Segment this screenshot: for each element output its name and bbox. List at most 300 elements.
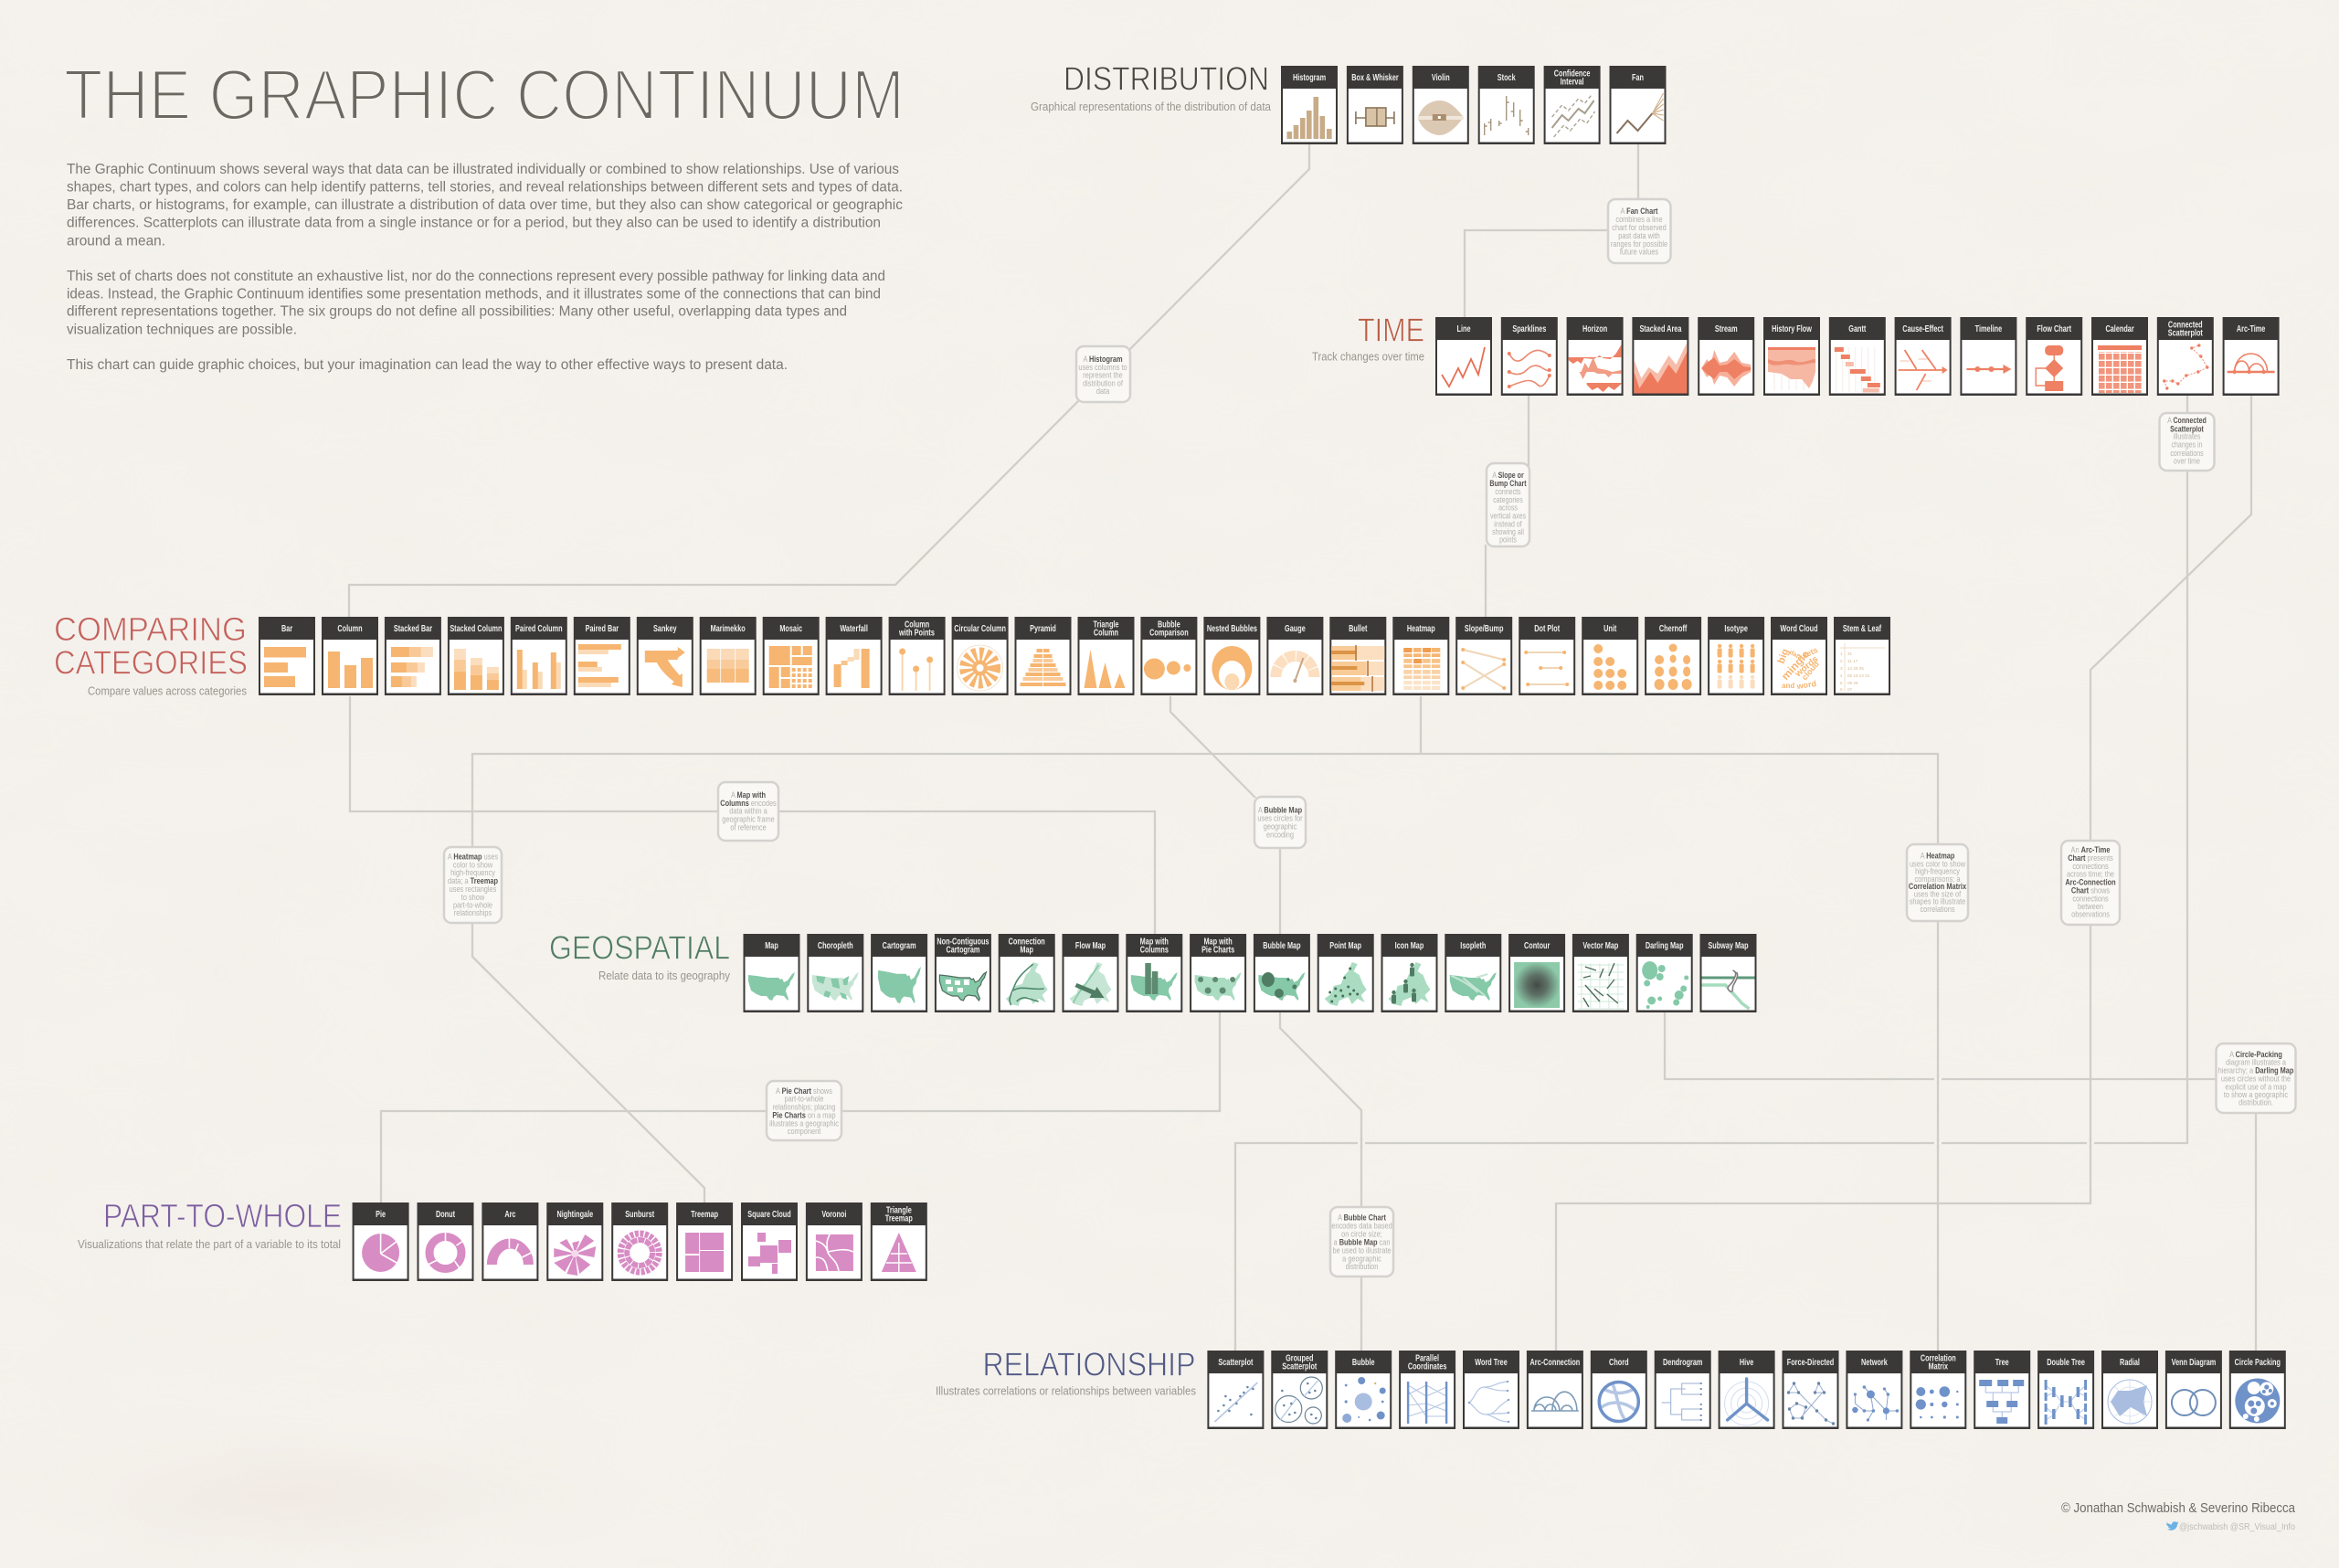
chart card: Line: Line bbox=[1457, 323, 1471, 334]
chart card: Arc-Connection: Arc-Connection bbox=[1530, 1357, 1580, 1367]
callout: Slope or Bump Chart: showing all bbox=[1492, 527, 1524, 536]
callout: Pie Chart: Pie Charts on a map bbox=[772, 1111, 836, 1119]
callout: Slope or Bump Chart: connects bbox=[1495, 487, 1521, 496]
callout: Arc-Time and Arc-Connection: connections bbox=[2072, 895, 2109, 903]
chart card: Stock: Stock bbox=[1498, 72, 1516, 82]
chart card: Triangle Column: Column bbox=[1094, 627, 1118, 638]
chart card: Grouped Scatterplot bbox=[1271, 1351, 1328, 1429]
chart card: Chernoff: Chernoff bbox=[1659, 623, 1687, 633]
callout: Fan Chart: A Fan Chart bbox=[1620, 207, 1658, 216]
chart card: Stacked Area bbox=[1632, 317, 1688, 396]
chart card: Sunburst: Sunburst bbox=[625, 1209, 654, 1219]
chart card: Pyramid bbox=[1014, 617, 1071, 695]
heading: Relationship: RELATIONSHIP bbox=[983, 1345, 1195, 1383]
callout: Heatmap and Treemap bbox=[444, 847, 502, 923]
callout: Heatmap and Correlation Matrix: A Heatmap bbox=[1921, 852, 1954, 861]
callout: Histogram: distribution of bbox=[1083, 379, 1124, 387]
chart card: Tree bbox=[1974, 1351, 2030, 1429]
callout: Map with Columns: of reference bbox=[730, 823, 767, 832]
chart card: Scatterplot bbox=[1207, 1351, 1264, 1429]
chart card: Map with Pie Charts: Pie Charts bbox=[1201, 944, 1234, 955]
panel: Distribution bbox=[1031, 60, 1667, 144]
chart card: Treemap: Treemap bbox=[691, 1209, 718, 1219]
callout: Fan Chart: chart for observed bbox=[1612, 223, 1667, 232]
chart card: Bubble Comparison bbox=[1140, 617, 1197, 695]
chart card: Radial bbox=[2101, 1351, 2158, 1429]
chart card: Map: Map bbox=[765, 940, 778, 950]
chart card: Bubble bbox=[1335, 1351, 1392, 1429]
chart card: Isopleth: Isopleth bbox=[1460, 940, 1486, 950]
chart card: Hive: Hive bbox=[1740, 1357, 1753, 1367]
chart card: Stem & Leaf: Stem & Leaf bbox=[1843, 623, 1881, 633]
chart card: Bubble Comparison: Comparison bbox=[1149, 627, 1189, 638]
panel: Comparing Categories bbox=[54, 610, 1890, 698]
callout: Heatmap and Treemap: uses rectangles bbox=[450, 885, 496, 894]
callout: Heatmap and Correlation Matrix: shapes to illustrate bbox=[1910, 897, 1966, 906]
callout: Circle Packing and Dorling Map: A Circle-Packing bbox=[2229, 1050, 2282, 1059]
heading: Comparing Categories: COMPARING bbox=[54, 610, 247, 648]
chart card: Confidence Interval: Confidence bbox=[1554, 68, 1591, 79]
chart card: Pie: Pie bbox=[376, 1209, 386, 1219]
callout: Circle Packing and Dorling Map: hierarchy; a Darling Map bbox=[2218, 1066, 2293, 1075]
chart card: Treemap bbox=[676, 1202, 733, 1281]
subtitle: Time: Track changes over time bbox=[1312, 351, 1424, 364]
chart card: Bubble Comparison: Bubble bbox=[1158, 619, 1180, 630]
callout: Heatmap and Correlation Matrix: high-frequency bbox=[1915, 867, 1961, 876]
chart card: Box & Whisker: Box & Whisker bbox=[1351, 72, 1399, 82]
callout: Heatmap and Treemap: data; a Treemap bbox=[448, 876, 498, 885]
callout: Connected Scatterplot: illustrates bbox=[2174, 432, 2200, 441]
title: THE GRAPHIC CONTINUUM bbox=[64, 55, 905, 135]
chart card: Fan: Fan bbox=[1632, 72, 1644, 82]
chart card: Slope/Bump: Slope/Bump bbox=[1465, 623, 1503, 633]
chart card: Paired Bar bbox=[574, 617, 630, 695]
callout: Heatmap and Correlation Matrix bbox=[1907, 844, 1968, 921]
panel: Geospatial bbox=[549, 928, 1756, 1012]
chart card: Word Tree bbox=[1463, 1351, 1519, 1429]
chart card: Non-Contiguous Cartogram bbox=[935, 934, 991, 1012]
chart card: Sankey: Sankey bbox=[653, 623, 677, 633]
chart card: Stream: Stream bbox=[1715, 323, 1738, 334]
chart card: Radial: Radial bbox=[2120, 1357, 2140, 1367]
chart card: Paired Column: Paired Column bbox=[515, 623, 563, 633]
intro text: The Graphic Continuum shows several ways that data can be illustrated individually or combined to show relationships. Use of various bbox=[67, 162, 899, 177]
chart card: Arc-Time: Arc-Time bbox=[2237, 323, 2265, 334]
chart card: Stacked Bar bbox=[385, 617, 441, 695]
callout: Bubble Map: uses circles for bbox=[1257, 814, 1303, 823]
chart card: Network: Network bbox=[1861, 1357, 1888, 1367]
chart card: Stem & Leaf: 31 bbox=[1847, 652, 1853, 656]
chart card: Connection Map: Connection bbox=[1009, 936, 1045, 947]
chart card: Darling Map: Darling Map bbox=[1646, 940, 1684, 950]
chart card: Subway Map: Subway Map bbox=[1708, 940, 1749, 950]
chart card: Venn Diagram: Venn Diagram bbox=[2172, 1357, 2216, 1367]
callout: Fan Chart bbox=[1608, 199, 1670, 263]
callout: Bubble Map: encoding bbox=[1266, 831, 1294, 839]
chart card: Bullet bbox=[1329, 617, 1386, 695]
chart card: Map with Pie Charts: Map with bbox=[1203, 936, 1233, 947]
callout: Circle Packing and Dorling Map bbox=[2217, 1044, 2295, 1113]
chart card: Flow Map: Flow Map bbox=[1075, 940, 1106, 950]
subtitle: Part-to-Whole: Visualizations that relate the part of a variable to its total bbox=[78, 1238, 341, 1251]
callout: Map with Columns: A Map with bbox=[731, 790, 766, 800]
callout: Slope or Bump Chart bbox=[1487, 463, 1529, 546]
callout: Bubble Map: geographic bbox=[1264, 822, 1297, 831]
chart card: Cartogram bbox=[871, 934, 927, 1012]
chart card: Heatmap: Heatmap bbox=[1407, 623, 1435, 633]
chart card: Violin: Violin bbox=[1432, 72, 1450, 82]
callout: Pie Chart: illustrates a geographic bbox=[769, 1119, 839, 1128]
chart card: Circle Packing bbox=[2229, 1351, 2286, 1429]
intro text: shapes, chart types, and colors can help identify patterns, tell stories, and reveal relationships between different sets and types of data. bbox=[67, 180, 903, 196]
chart card: Column with Points: with Points bbox=[898, 627, 935, 638]
chart card: Box & Whisker bbox=[1347, 66, 1403, 144]
intro text bbox=[67, 162, 903, 373]
chart card: History Flow: History Flow bbox=[1772, 323, 1812, 334]
callout: Slope or Bump Chart: across bbox=[1498, 503, 1518, 513]
chart card: Isotype: Isotype bbox=[1724, 623, 1748, 633]
chart card: Bubble Map: Bubble Map bbox=[1263, 940, 1301, 950]
chart card: Stock bbox=[1478, 66, 1535, 144]
chart card: Connected Scatterplot bbox=[2157, 317, 2214, 396]
chart card: Nested Bubbles bbox=[1203, 617, 1260, 695]
chart card: Voronoi: Voronoi bbox=[821, 1209, 846, 1219]
chart card: Nightingale bbox=[546, 1202, 603, 1281]
chart card: Connected Scatterplot: Scatterplot bbox=[2168, 327, 2203, 338]
credit bbox=[2061, 1501, 2296, 1532]
callout: Slope or Bump Chart: instead of bbox=[1494, 520, 1522, 529]
callout: Bubble Chart: distribution bbox=[1346, 1262, 1378, 1271]
chart card: Map with Pie Charts bbox=[1190, 934, 1246, 1012]
callout: Fan Chart: past data with bbox=[1618, 231, 1660, 240]
chart card: Sparklines bbox=[1501, 317, 1558, 396]
callout: Bubble Chart: on circle size; bbox=[1341, 1230, 1382, 1238]
chart card: Nested Bubbles: Nested Bubbles bbox=[1207, 623, 1257, 633]
chart card: Dendrogram bbox=[1655, 1351, 1711, 1429]
callout: Map with Columns bbox=[718, 782, 778, 841]
chart card: Nightingale: Nightingale bbox=[556, 1209, 593, 1219]
chart card: Venn Diagram bbox=[2165, 1351, 2222, 1429]
intro text: ideas. Instead, the Graphic Continuum identifies some presentation methods, and it illustrates some of the connections that can bind bbox=[67, 286, 881, 302]
chart card: Violin bbox=[1413, 66, 1469, 144]
chart card: Column bbox=[322, 617, 378, 695]
chart card: Word Cloud: big bbox=[1776, 647, 1791, 665]
chart card: Histogram bbox=[1281, 66, 1338, 144]
chart card: Calendar bbox=[2091, 317, 2148, 396]
callout: Arc-Time and Arc-Connection bbox=[2061, 841, 2120, 925]
chart card: Timeline: Timeline bbox=[1975, 323, 2002, 334]
callout: Connected Scatterplot: correlations bbox=[2170, 449, 2204, 458]
chart card: Word Cloud: word bbox=[1795, 679, 1817, 691]
callout: Bubble Chart: be used to illustrate bbox=[1333, 1246, 1392, 1255]
chart card: Stem & Leaf: 2 bbox=[1840, 659, 1843, 663]
chart card: Word Cloud: mingle bbox=[1779, 648, 1812, 683]
chart card: Force-Directed bbox=[1782, 1351, 1838, 1429]
callout: Bubble Chart: a geographic bbox=[1342, 1255, 1381, 1263]
chart card: Column with Points bbox=[889, 617, 946, 695]
callout: Arc-Time and Arc-Connection: across time; the bbox=[2067, 870, 2114, 879]
chart card: Icon Map: Icon Map bbox=[1395, 940, 1424, 950]
chart card: History Flow bbox=[1763, 317, 1820, 396]
chart card: Horizon bbox=[1567, 317, 1624, 396]
callout: Heatmap and Correlation Matrix: correlations bbox=[1920, 905, 1955, 914]
callout: Slope or Bump Chart: points bbox=[1499, 535, 1517, 545]
chart card: Calendar: Calendar bbox=[2105, 323, 2134, 334]
callout: Map with Columns: Columns encodes bbox=[720, 799, 777, 808]
chart card: Stem & Leaf: 5 bbox=[1840, 681, 1843, 685]
chart card: Confidence Interval: Interval bbox=[1561, 76, 1584, 87]
chart card: Arc: Arc bbox=[504, 1209, 516, 1219]
chart card: Triangle Treemap: Treemap bbox=[885, 1213, 913, 1224]
callout: Histogram: represent the bbox=[1083, 371, 1123, 380]
intro text: visualization techniques are possible. bbox=[67, 322, 297, 338]
chart card: Mosaic: Mosaic bbox=[779, 623, 802, 633]
callout: Heatmap and Treemap: A Heatmap uses bbox=[448, 853, 498, 862]
chart card: Network bbox=[1846, 1351, 1902, 1429]
callout: Heatmap and Correlation Matrix: uses color to show bbox=[1910, 860, 1965, 868]
callout: Arc-Time and Arc-Connection: connections bbox=[2072, 862, 2109, 871]
callout: Connected Scatterplot: over time bbox=[2174, 457, 2200, 466]
chart card: Stacked Column: Stacked Column bbox=[450, 623, 502, 633]
callout: Bubble Map bbox=[1254, 797, 1306, 848]
chart card: Stem & Leaf: 05 18 24 31 bbox=[1847, 673, 1870, 678]
chart card: Connection Map bbox=[999, 934, 1055, 1012]
chart card: Marimekko: Marimekko bbox=[711, 623, 746, 633]
chart card: Bubble Map bbox=[1254, 934, 1310, 1012]
chart card: Tree: Tree bbox=[1995, 1357, 2009, 1367]
callout: Heatmap and Treemap: high-frequency bbox=[450, 868, 496, 877]
callout: Connected Scatterplot: Scatterplot bbox=[2170, 425, 2204, 434]
credit: © Jonathan Schwabish & Severino Ribecca bbox=[2061, 1501, 2296, 1516]
callout: Heatmap and Treemap: color to show bbox=[453, 861, 492, 869]
chart card: Circle Packing: Circle Packing bbox=[2235, 1357, 2281, 1367]
chart card: Line bbox=[1435, 317, 1492, 396]
chart card: Triangle Column bbox=[1078, 617, 1135, 695]
chart card: Force-Directed: Force-Directed bbox=[1787, 1357, 1834, 1367]
chart card: Contour bbox=[1508, 934, 1565, 1012]
chart card: Bar: Bar bbox=[281, 623, 293, 633]
chart card: Word Cloud: cloud bbox=[1800, 659, 1821, 682]
chart card: Sparklines: Sparklines bbox=[1512, 323, 1546, 334]
chart card: Choropleth: Choropleth bbox=[818, 940, 853, 950]
chart card: Arc-Connection bbox=[1527, 1351, 1583, 1429]
panel: Time bbox=[1312, 311, 2280, 396]
chart card: Waterfall: Waterfall bbox=[840, 623, 868, 633]
chart card: Stem & Leaf bbox=[1834, 617, 1890, 695]
chart card: Choropleth bbox=[807, 934, 863, 1012]
chart card: Dot Plot: Dot Plot bbox=[1534, 623, 1560, 633]
chart card: Paired Column bbox=[511, 617, 567, 695]
chart card: Stem & Leaf: 14 26 35 bbox=[1847, 666, 1864, 671]
chart card: Triangle Column: Triangle bbox=[1094, 619, 1119, 630]
chart card: Word Cloud: Word Cloud bbox=[1780, 623, 1818, 633]
intro text: different representations together. The six groups do not define all possibilities: Many other useful, overlapping data types and bbox=[67, 304, 847, 320]
chart card: Cause-Effect bbox=[1895, 317, 1952, 396]
subtitle: Relationship: Illustrates correlations or relationships between variables bbox=[936, 1385, 1196, 1398]
heading: Part-to-Whole: PART-TO-WHOLE bbox=[103, 1197, 342, 1234]
chart card: Sankey bbox=[637, 617, 693, 695]
callout: Map with Columns: geographic frame bbox=[722, 815, 775, 824]
chart card: Slope/Bump bbox=[1455, 617, 1512, 695]
callout: Arc-Time and Arc-Connection: Chart presents bbox=[2068, 853, 2113, 863]
callout: Arc-Time and Arc-Connection: observations bbox=[2071, 910, 2110, 919]
chart card: Darling Map bbox=[1636, 934, 1693, 1012]
chart card: Marimekko bbox=[700, 617, 757, 695]
chart card: Hive bbox=[1719, 1351, 1775, 1429]
callout: Pie Chart: part-to-whole bbox=[784, 1095, 824, 1104]
heading: Geospatial: GEOSPATIAL bbox=[549, 928, 730, 967]
icon: twitter bird bbox=[2166, 1521, 2178, 1531]
chart card: Parallel Coordinates bbox=[1399, 1351, 1455, 1429]
chart card: Chord bbox=[1591, 1351, 1647, 1429]
chart card: Stem & Leaf: 09 28 bbox=[1847, 681, 1858, 685]
chart card: Stem & Leaf: 4 bbox=[1840, 673, 1843, 678]
chart card: Dot Plot bbox=[1519, 617, 1575, 695]
callout: Histogram: A Histogram bbox=[1083, 355, 1123, 364]
chart card: Correlation Matrix: Correlation bbox=[1921, 1352, 1956, 1363]
chart card: Correlation Matrix bbox=[1910, 1351, 1966, 1429]
chart card: Point Map: Point Map bbox=[1329, 940, 1361, 950]
callout: Pie Chart: component bbox=[788, 1127, 821, 1136]
callout: Fan Chart: future values bbox=[1620, 248, 1658, 257]
chart card: Flow Chart bbox=[2026, 317, 2082, 396]
chart card: Cartogram: Cartogram bbox=[883, 940, 916, 950]
callout: Heatmap and Correlation Matrix: Correlation Matrix bbox=[1909, 882, 1967, 891]
chart card: Map bbox=[744, 934, 800, 1012]
callout: Connected Scatterplot: A Connected bbox=[2167, 416, 2207, 425]
callout: Bubble Map: A Bubble Map bbox=[1258, 806, 1302, 815]
callout: Fan Chart: ranges for possible bbox=[1611, 239, 1668, 249]
chart card: Correlation Matrix: Matrix bbox=[1929, 1361, 1948, 1372]
chart card: Subway Map bbox=[1699, 934, 1756, 1012]
chart card: Grouped Scatterplot: Grouped bbox=[1286, 1352, 1314, 1363]
chart card: Isopleth bbox=[1445, 934, 1501, 1012]
intro text: around a mean. bbox=[67, 233, 165, 249]
chart card: Gantt bbox=[1829, 317, 1886, 396]
heading: Time: TIME bbox=[1358, 311, 1424, 349]
chart card: Pyramid: Pyramid bbox=[1030, 623, 1056, 633]
chart card: Stacked Area: Stacked Area bbox=[1639, 323, 1682, 334]
chart card: Paired Bar: Paired Bar bbox=[586, 623, 619, 633]
callout: Histogram bbox=[1076, 346, 1130, 402]
social handles: @jschwabish @SR_Visual_Info bbox=[2179, 1521, 2295, 1532]
chart card: Word Cloud: words bbox=[1793, 654, 1821, 680]
subtitle: Comparing Categories: Compare values across categories bbox=[88, 685, 247, 698]
chart card: Isotype bbox=[1708, 617, 1764, 695]
callout: Histogram: uses columns to bbox=[1078, 363, 1127, 372]
callout: Slope or Bump Chart: A Slope or bbox=[1492, 471, 1524, 480]
chart card: Double Tree: Double Tree bbox=[2047, 1357, 2085, 1367]
chart card: Non-Contiguous Cartogram: Non-Contiguous bbox=[937, 936, 990, 947]
chart card: Map with Columns: Map with bbox=[1140, 936, 1169, 947]
intro text: Bar charts, or histograms, for example, can illustrate a distribution of data over time, but they also can show categorical or geographic bbox=[67, 197, 903, 213]
heading: Comparing Categories: CATEGORIES bbox=[54, 643, 248, 682]
callout: Arc-Time and Arc-Connection: An Arc-Time bbox=[2071, 845, 2111, 854]
chart card: Fan bbox=[1610, 66, 1667, 144]
connector lines bbox=[349, 144, 2256, 1351]
chart card: Stem & Leaf: 3 bbox=[1840, 666, 1843, 671]
chart card: Non-Contiguous Cartogram: Cartogram bbox=[946, 944, 980, 955]
chart card: Unit bbox=[1582, 617, 1638, 695]
chart card: Stem & Leaf: 1 bbox=[1840, 652, 1843, 656]
chart card: Unit: Unit bbox=[1603, 623, 1616, 633]
callout: Heatmap and Treemap: to show bbox=[461, 893, 484, 902]
chart card: Bullet: Bullet bbox=[1349, 623, 1368, 633]
intro text: This set of charts does not constitute an exhaustive list, nor do the connections represent every possible pathway for linking data and bbox=[67, 269, 885, 284]
chart card: Triangle Treemap: Triangle bbox=[886, 1204, 912, 1215]
chart card: Waterfall bbox=[826, 617, 883, 695]
callout: Circle Packing and Dorling Map: explicit use of a map bbox=[2225, 1083, 2287, 1091]
callout: Bubble Chart: A Bubble Chart bbox=[1338, 1213, 1386, 1222]
chart card: Mosaic bbox=[763, 617, 820, 695]
subtitle: Geospatial: Relate data to its geography bbox=[598, 969, 731, 982]
chart card: Flow Map bbox=[1062, 934, 1118, 1012]
chart card: Gantt: Gantt bbox=[1848, 323, 1866, 334]
callout: Heatmap and Correlation Matrix: comparisons; a bbox=[1914, 874, 1961, 884]
chart card: Heatmap bbox=[1392, 617, 1449, 695]
chart card: Gauge bbox=[1266, 617, 1323, 695]
chart card: Pie bbox=[353, 1202, 409, 1281]
chart card: Confidence Interval bbox=[1544, 66, 1601, 144]
chart card: Scatterplot: Scatterplot bbox=[1218, 1357, 1254, 1367]
chart card: Word Cloud: data bbox=[1788, 650, 1803, 662]
chart card: Double Tree bbox=[2037, 1351, 2094, 1429]
chart card: Arc bbox=[482, 1202, 538, 1281]
chart card: Stream bbox=[1698, 317, 1754, 396]
chart card: Word Tree: Word Tree bbox=[1475, 1357, 1508, 1367]
callout: Circle Packing and Dorling Map: uses circles without the bbox=[2221, 1075, 2291, 1083]
chart card: Connection Map: Map bbox=[1020, 944, 1033, 955]
chart card: Voronoi bbox=[806, 1202, 863, 1281]
chart card: Dendrogram: Dendrogram bbox=[1663, 1357, 1703, 1367]
chart card: Contour: Contour bbox=[1524, 940, 1551, 950]
chart card: Bar bbox=[259, 617, 315, 695]
callout: Bubble Chart: a Bubble Map can bbox=[1334, 1238, 1390, 1246]
callout: Circle Packing and Dorling Map: diagram illustrates a bbox=[2226, 1058, 2286, 1067]
chart card: Arc-Time bbox=[2223, 317, 2280, 396]
callout: Connected Scatterplot bbox=[2160, 413, 2215, 471]
callout: Heatmap and Treemap: relationships bbox=[454, 908, 492, 917]
callout: Map with Columns: data within a bbox=[729, 807, 767, 816]
chart card: Stem & Leaf: 11 17 bbox=[1847, 659, 1858, 663]
callout: Heatmap and Treemap: part-to-whole bbox=[453, 901, 492, 910]
callout: Slope or Bump Chart: vertical axes bbox=[1490, 512, 1526, 521]
chart card: Map with Columns: Columns bbox=[1140, 944, 1169, 955]
callout: Bubble Chart: encodes data based bbox=[1331, 1222, 1392, 1230]
chart card: Column with Points: Column bbox=[905, 619, 929, 630]
chart card: Bubble: Bubble bbox=[1352, 1357, 1375, 1367]
subtitle: Distribution: Graphical representations of the distribution of data bbox=[1031, 101, 1271, 113]
callout: Arc-Time and Arc-Connection: Chart shows bbox=[2071, 886, 2110, 895]
chart card: Circular Column: Circular Column bbox=[954, 623, 1006, 633]
chart card: Vector Map: Vector Map bbox=[1582, 940, 1618, 950]
chart card: Parallel Coordinates: Coordinates bbox=[1408, 1361, 1447, 1372]
intro text: differences. Scatterplots can illustrate data from a single instance or for a period, but they also can be used to identify a distribution bbox=[67, 216, 881, 231]
chart card: Vector Map bbox=[1572, 934, 1629, 1012]
chart card: Triangle Treemap bbox=[871, 1202, 927, 1281]
chart card: Sunburst bbox=[611, 1202, 668, 1281]
chart card: Parallel Coordinates: Parallel bbox=[1415, 1352, 1439, 1363]
callout: Arc-Time and Arc-Connection: Arc-Connection bbox=[2065, 878, 2116, 887]
chart card: Gauge: Gauge bbox=[1285, 623, 1306, 633]
chart card: Chord: Chord bbox=[1609, 1357, 1629, 1367]
chart card: Square Cloud bbox=[741, 1202, 798, 1281]
chart card: Chernoff bbox=[1645, 617, 1701, 695]
callout: Pie Chart: relationships; placing bbox=[773, 1103, 835, 1112]
callout: Pie Chart: A Pie Chart shows bbox=[776, 1086, 832, 1096]
chart card: Stem & Leaf: 07 bbox=[1847, 687, 1853, 692]
callout: Fan Chart: combines a line bbox=[1615, 215, 1663, 224]
